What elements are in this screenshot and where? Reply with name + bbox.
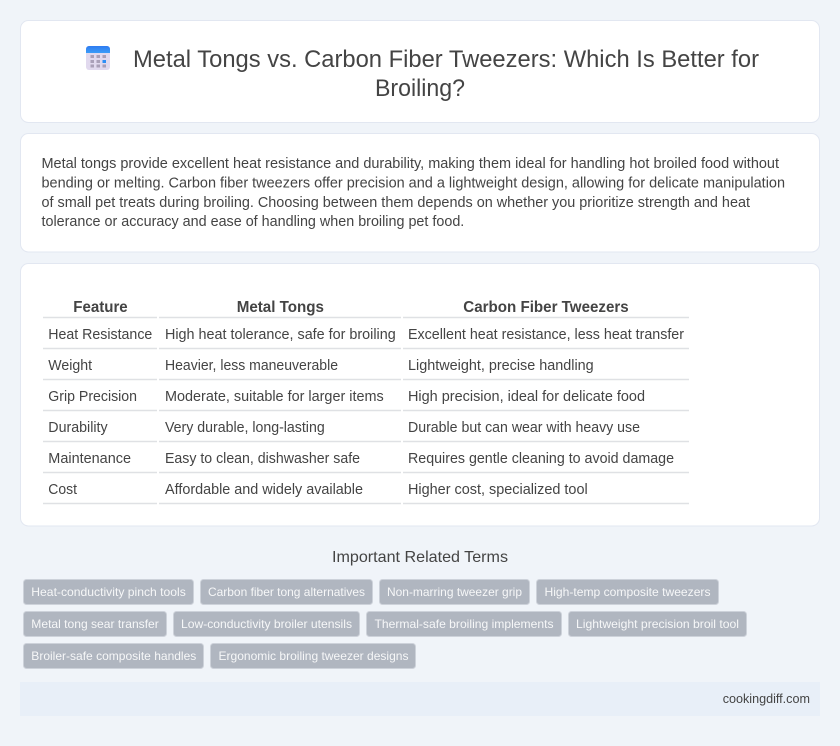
row: durability: Durable but can wear with heavy use xyxy=(408,420,640,436)
tag: Metal tong sear transfer xyxy=(31,617,159,631)
tag: Carbon fiber tong alternatives xyxy=(208,585,365,599)
row: maintenance: Easy to clean, dishwasher safe xyxy=(165,451,360,467)
tag xyxy=(174,612,360,636)
summary text: bending or melting. Carbon fiber tweezers offer precision and a lightweight design, allowing for delicate manipulation xyxy=(42,175,785,191)
tag: Broiler-safe composite handles xyxy=(31,649,196,663)
row: heat resistance: Excellent heat resistance, less heat transfer xyxy=(408,327,684,343)
row: grip precision: High precision, ideal for delicate food xyxy=(408,389,645,405)
tag xyxy=(366,612,562,636)
tag: High-temp composite tweezers xyxy=(544,585,710,599)
heading: related terms: Important Related Terms xyxy=(332,549,508,566)
tag: Lightweight precision broil tool xyxy=(576,617,739,631)
row: weight xyxy=(43,358,689,380)
footer xyxy=(20,682,820,716)
title: Metal Tongs vs. Carbon Fiber Tweezers: Which Is Better for xyxy=(133,46,759,73)
summary text xyxy=(42,156,785,230)
tag group: related terms xyxy=(24,580,746,668)
title xyxy=(133,46,759,102)
tag xyxy=(536,580,718,604)
row: maintenance xyxy=(43,451,689,472)
row: grip precision: Moderate, suitable for larger items xyxy=(165,389,384,405)
summary text: of small pet treats during broiling. Choosing between them depends on whether you prioritize strength and heat xyxy=(42,195,750,211)
row: durability: Very durable, long-lasting xyxy=(165,420,325,436)
footer: cookingdiff.com xyxy=(723,691,810,706)
row: maintenance: Maintenance xyxy=(48,451,131,467)
tag: Low-conductivity broiler utensils xyxy=(181,617,352,631)
row: heat resistance: High heat tolerance, safe for broiling xyxy=(165,327,396,343)
table header: Feature xyxy=(73,299,128,316)
row: weight: Heavier, less maneuverable xyxy=(165,358,338,374)
tag xyxy=(380,580,530,604)
table header: Metal Tongs xyxy=(237,299,324,316)
row: cost: Higher cost, specialized tool xyxy=(408,482,588,498)
tag xyxy=(568,612,746,636)
row: cost: Cost xyxy=(48,482,77,498)
table header xyxy=(43,299,689,318)
tag: Thermal-safe broiling implements xyxy=(374,617,554,631)
panel: header xyxy=(20,20,820,122)
table header: Carbon Fiber Tweezers xyxy=(463,299,629,316)
row: weight: Lightweight, precise handling xyxy=(408,358,594,374)
row: weight: Weight xyxy=(48,358,92,374)
summary text: tolerance or accuracy and ease of handling when broiling pet food. xyxy=(42,214,464,230)
tag xyxy=(210,644,416,668)
panel: summary xyxy=(20,134,820,252)
row: grip precision: Grip Precision xyxy=(48,389,137,405)
title: Broiling? xyxy=(375,75,465,102)
icon: calendar xyxy=(86,46,110,70)
tag: Heat-conductivity pinch tools xyxy=(31,585,186,599)
row: heat resistance xyxy=(43,327,689,348)
panel: comparison table xyxy=(20,264,820,526)
tag xyxy=(24,580,194,604)
tag: Ergonomic broiling tweezer designs xyxy=(218,649,408,663)
tag: Non-marring tweezer grip xyxy=(387,585,522,599)
row: cost xyxy=(43,482,689,504)
row: durability xyxy=(43,420,689,442)
tag xyxy=(200,580,372,604)
tag xyxy=(24,644,204,668)
summary text: Metal tongs provide excellent heat resistance and durability, making them ideal for handling hot broiled food without xyxy=(42,156,779,172)
row: heat resistance: Heat Resistance xyxy=(48,327,152,343)
tag xyxy=(24,612,166,636)
row: grip precision xyxy=(43,389,689,410)
row: durability: Durability xyxy=(48,420,108,436)
row: cost: Affordable and widely available xyxy=(165,482,363,498)
row: maintenance: Requires gentle cleaning to avoid damage xyxy=(408,451,674,467)
